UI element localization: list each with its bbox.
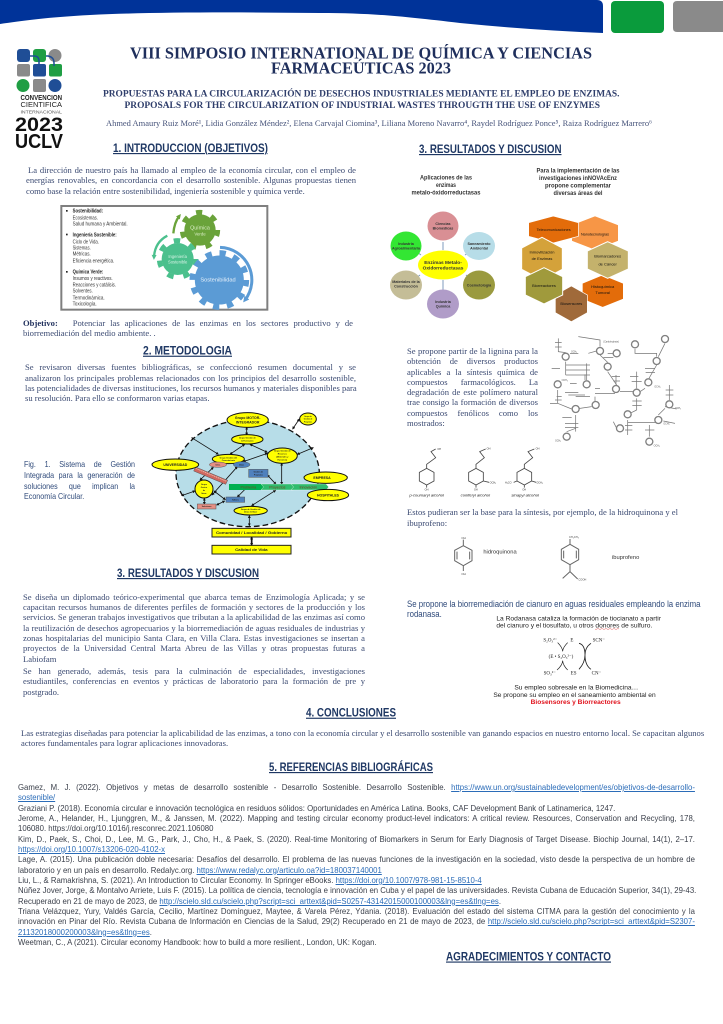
diagram node: Grupo Gestion de Recursos: Humanos) bbox=[277, 460, 288, 462]
text block: figure 1 caption bbox=[24, 460, 135, 501]
text block: methodology: las potencialidades de diversas instituciones, los recursos humanos y materiales disponibles para bbox=[25, 383, 357, 393]
text block: conclusions: Las estrategias diseñadas para potenciar la aplicabilidad de las enzimas, a tono con la economía circular y el desarrollo sostenible van ganando espacios en nuestro entorno local. Se capacitan algunos bbox=[21, 728, 704, 738]
heading: 3. Resultados y discusion (right column): 3. RESULTADOS Y DISCUSION bbox=[419, 143, 562, 156]
chart: management system diagram bbox=[152, 413, 349, 554]
heading: 3. Resultados y discusion (left column): 3. RESULTADOS Y DISCUSION bbox=[117, 567, 259, 580]
diagram: reaction cycle bbox=[543, 638, 605, 677]
logo: Convención Científica Internacional 2023 UCLV bbox=[15, 49, 64, 153]
panel: rhodanese reaction: del cianuro y el tiosulfato, u otros donores de sulfuro. bbox=[496, 624, 653, 630]
heading: enzyme applications: metalo-óxidorreductasas bbox=[412, 189, 481, 196]
diagram node: external group bbox=[300, 413, 316, 425]
icon: gear Quimica Verde bbox=[173, 212, 218, 248]
logo: Convención Científica Internacional 2023 UCLV: INTERNACIONAL bbox=[20, 110, 62, 116]
diagram node: Grupo Gestor de Ideas: Gestor bbox=[201, 486, 207, 489]
hexagon: Biorreactores: Biorreactores bbox=[532, 283, 556, 288]
text block: bibliographic references: Graziani P. (2018). Economía circular e innovación tecnológica en residuos sólidos: Oportunidades en América Latina. Books, CAF Development Bank of Latinamerica, 1247. bbox=[18, 803, 615, 813]
subtitle: PROPUESTAS PARA LA CIRCULARIZACIÓN DE DESECHOS INDUSTRIALES MEDIANTE EL EMPLEO DE ENZIMAS. bbox=[103, 87, 620, 99]
text block: figure 1 caption: Fig. 1. Sistema de Gestión bbox=[24, 460, 135, 469]
text block: objective: Objetivo: Potenciar las aplicaciones de las enzimas en los sectores productivo y de bbox=[23, 318, 353, 328]
diagram node: Grupo Gestor de Ideas: Ideas bbox=[201, 493, 207, 495]
text block: results: Se diseña un diplomado teórico-experimental que abarca temas de Enzimología Aplicada; y se bbox=[23, 592, 365, 602]
list: sustainability concepts: Solventes. bbox=[73, 289, 93, 295]
chart: phenolic monomers: OCH₃ bbox=[490, 482, 496, 485]
panel: sustainability gears figure bbox=[61, 206, 267, 310]
diagram: red and blue process nodes: Talleres bbox=[232, 499, 239, 501]
diagram: green process arrow: Innovación bbox=[299, 485, 317, 489]
diagram node: Grupo Motor: INTEGRADOR bbox=[236, 420, 260, 424]
chart: phenolic monomers: OH bbox=[522, 489, 526, 492]
chart: phenolic monomers: sinapyl alcohol bbox=[511, 493, 539, 497]
diagram node: Universidad: UNIVERSIDAD bbox=[163, 463, 188, 467]
text block: bibliographic references: Kim, D., Paek, S., Choi, D., Lee, M. G., Park, J., Cho, H., & Paek, S. (2020). Real-time Monitoring of Biomarkers in Serum for Early Diagnosis of Target Disease. Biochip Journal, 14(1), 2–17. bbox=[18, 834, 695, 844]
text block: lignin proposal: mostrados: bbox=[407, 418, 445, 428]
panel: rhodanese reaction: Su empleo sobresale en la Biomedicina… bbox=[514, 686, 638, 692]
text block: lignin proposal: compuestos farmacológicos. La bbox=[407, 377, 538, 387]
diagram node: Grupo de Gestion de Ideas de Base: Grupo de Gestión de bbox=[241, 508, 261, 511]
text block: hydroquinone and ibuprofen: ibuprofeno: bbox=[407, 518, 447, 528]
chart: hydroquinone and ibuprofen structures: ibuprofeno bbox=[612, 555, 639, 561]
diagram: green process arrow bbox=[229, 484, 329, 490]
subtitle: PROPOSALS FOR THE CIRCULARIZATION OF INDUSTRIAL WASTES THROUGTH THE USE OF ENZYMES bbox=[124, 100, 600, 111]
title bbox=[130, 44, 592, 78]
list: sustainability concepts: Reacciones y catálisis. bbox=[73, 283, 116, 289]
icon: gear Sostenibilidad: Sostenibilidad bbox=[200, 278, 236, 284]
diagram node: external group: Proyectos bbox=[304, 420, 312, 423]
icon: gear Sostenibilidad bbox=[192, 247, 252, 307]
diagram: reaction cycle: S₂O₃²⁻ bbox=[543, 638, 558, 644]
node: Enzimas Metalo-Oxidorreductasas: Oxidorreductasas bbox=[423, 266, 464, 272]
chart: phenolic monomers: OH bbox=[425, 489, 429, 492]
text block: lignin proposal: obtención de diversos productos bbox=[407, 356, 538, 366]
diagram: red and blue process nodes: Soluciones bbox=[202, 506, 212, 508]
list: sustainability concepts: Ciclo de Vida. bbox=[73, 239, 99, 245]
text block: bibliographic references: 106080. https://doi.org/10.1016/j.resconrec.2021.106080 bbox=[18, 823, 213, 833]
list: sustainability concepts: Eficiencia energética. bbox=[73, 258, 114, 264]
chart: lignin structure: OCH₃ bbox=[663, 423, 670, 425]
list: sustainability concepts: Sostenibilidad: bbox=[73, 209, 103, 215]
text block: bibliographic references: laboratorio y en un país en desarrollo. Redalyc.org. https://www.redalyc.org/articulo.oa?id=180037140001 bbox=[18, 865, 382, 875]
chart: phenolic monomers: OH bbox=[536, 448, 540, 451]
hexagon: Histoquimica Tumoral bbox=[582, 275, 623, 307]
text block: lignin proposal: aplicables a la síntesis química de bbox=[407, 367, 538, 377]
title: FARMACEÚTICAS 2023 bbox=[271, 58, 451, 78]
text block: results: servicios. Se generan trabajos investigativos que tributan a la aplicabilidad de las enzimas así como bbox=[23, 612, 365, 622]
text block: methodology bbox=[25, 362, 357, 403]
diagram node: Hospitales bbox=[307, 489, 349, 501]
text block: hydroquinone and ibuprofen: Estos pudieran ser la base para la síntesis, por ejemplo, de la hidroquinona y el bbox=[407, 507, 678, 517]
diagram: red and blue process nodes bbox=[194, 462, 268, 509]
panel: rhodanese reaction: Biosensores y Biorreactores bbox=[531, 700, 621, 706]
heading: enzyme applications bbox=[412, 174, 481, 196]
diagram: reaction cycle: ES bbox=[571, 672, 577, 677]
text block: objective: biorremediación del medio ambiente. . bbox=[23, 328, 156, 338]
text block: cyanide bioremediation: Se propone la biorremediación de cianuro en aguas residuales empleando la enzima bbox=[407, 598, 701, 608]
diagram node: Grupo Gestor de Ideas: Grupo bbox=[201, 483, 208, 486]
diagram: red and blue process nodes: Datos bbox=[239, 463, 244, 466]
diagram node: Grupo Gestion de Recursos: (Materiales y bbox=[276, 456, 289, 459]
chart: phenolic monomers: coniferyl alcohol bbox=[461, 493, 490, 497]
diagram: reaction cycle: SCN⁻ bbox=[593, 639, 605, 644]
list: sustainability concepts: Termodinámica. bbox=[73, 295, 105, 301]
hexagon: Biomarcadores de Cancer: Biomarcadores bbox=[594, 253, 621, 258]
text block: introduction: La dirección de nuestro país ha llamado al empleo de la economía circular, con el empleo de bbox=[28, 165, 356, 175]
chart: complementary research areas hexagons bbox=[522, 216, 628, 322]
text block: results: proyectos de la Universidad Central Marta Abreu de las Villas y otras propuestas futuras a bbox=[23, 643, 365, 653]
node: Saneamiento Ambiental: Ambiental bbox=[470, 246, 488, 250]
chart: hydroquinone and ibuprofen structures: hidroquinona bbox=[483, 550, 518, 556]
text block: results continued: Se han generado, además, tesis para la culminación de especialidades, investigaciones bbox=[23, 666, 365, 676]
diagram node: Grupo de Gestion de Ideas de Base bbox=[234, 506, 267, 515]
diagram: reaction cycle: SO₃²⁻ bbox=[544, 671, 556, 677]
diagram: red and blue process nodes: Proyectos bbox=[254, 474, 263, 477]
text block: introduction bbox=[26, 165, 356, 196]
text block: bibliographic references: Recuperado en 21 de mayo de 2023, de http://scielo.sld.cu/scielo.php?script=sci_arttext&pid=S0257-43142015000100003&lng=es&tlng=es. bbox=[18, 896, 501, 906]
diagram: green process arrow: Problema bbox=[241, 485, 257, 489]
heading: implementation statement: diversas áreas del bbox=[554, 190, 603, 197]
chart: hydroquinone and ibuprofen structures: OH bbox=[461, 536, 466, 540]
text block: cyanide bioremediation: rodanasa. bbox=[407, 609, 442, 619]
list: sustainability concepts: Insumos y reactivos. bbox=[73, 276, 113, 282]
diagram node: Grupo Gestion de Recursos: Grupo Gestión de bbox=[274, 450, 292, 453]
heading: implementation statement bbox=[536, 167, 620, 197]
text block: methodology: su resolución. Para ello se conformaron varias etapas. bbox=[25, 393, 209, 403]
node: Saneamiento Ambiental: Saneamiento bbox=[468, 242, 491, 246]
text block: lignin proposal: trae consigo la formación de diversos bbox=[407, 397, 538, 407]
heading: 5. Referencias bibliograficas: 5. REFERENCIAS BIBLIOGRÁFICAS bbox=[269, 761, 433, 774]
diagram node: Grupo Gestion de Recursos bbox=[267, 448, 297, 463]
diagram node: Grupo Gestor de Ideas bbox=[195, 480, 213, 498]
text block: bibliographic references: Jerome, A., Helander, H., Ljunggren, M., & Janssen, M. (2022). Mapping and testing circular economy product-level indicators: A critical review. Resources, Conservation and Recycling, 178, bbox=[18, 813, 695, 823]
text block: results continued bbox=[23, 666, 365, 697]
panel: rhodanese reaction bbox=[493, 616, 661, 706]
diagram node: external group: Grupo de bbox=[304, 416, 312, 418]
text block: results continued: postgrado. bbox=[23, 687, 59, 697]
diagram node: external group: Gestión de bbox=[304, 418, 312, 421]
hexagon: Biomarcadores de Cancer: de Cáncer bbox=[598, 262, 618, 267]
heading: implementation statement: Para la implementación de las bbox=[536, 167, 620, 174]
node: Industria Agroalimentaria bbox=[390, 232, 422, 260]
diagram node: Grupo Gestion del Conocimiento: Grupo Gestión del bbox=[220, 456, 237, 459]
chart: phenolic monomers: H₃CO bbox=[505, 482, 512, 485]
chart: phenolic monomers: OH bbox=[487, 448, 491, 451]
icon: gear Quimica Verde: Verde bbox=[194, 232, 206, 237]
text block: results: zonas hospitalarias del municipio Santa Clara, en Villa Clara. Estas investigaciones se insertan a bbox=[23, 633, 365, 643]
diagram node: Hospitales: HOSPITALES bbox=[317, 493, 340, 497]
diagram node: Grupo Gestion del Conocimiento: Conocimiento bbox=[222, 459, 236, 462]
list: sustainability concepts: Salud humana y Ambiental. bbox=[73, 221, 128, 227]
heading: enzyme applications: Aplicaciones de las bbox=[420, 174, 472, 181]
hexagon: Histoquimica Tumoral: Tumoral bbox=[595, 290, 610, 295]
node: Cosmetologia: Cosmetología bbox=[467, 284, 492, 288]
chart: hydroquinone and ibuprofen structures: CH₂CH₃ bbox=[569, 535, 579, 539]
diagram: reaction cycle: (E • S₂O₃²⁻) bbox=[549, 654, 574, 660]
chart: hydroquinone and ibuprofen structures: COOH bbox=[578, 577, 586, 581]
text block: results: capacitan recursos humanos de diferentes perfiles de formación y sectores de la producción y los bbox=[23, 602, 365, 612]
node: Materiales de la Construccion bbox=[390, 270, 422, 300]
diagram box: Comunidad / Localidad / Gobierno bbox=[212, 528, 291, 537]
hexagon: Biomarcadores de Cancer bbox=[587, 242, 628, 278]
chart: oxidoreductase enzyme applications bbox=[390, 212, 495, 318]
chart: phenolic monomers: OCH₃ bbox=[536, 482, 543, 485]
diagram node: Grupo Motor bbox=[227, 413, 268, 427]
text block: results: la reutilización de desechos agropecuarios y la biorremediación de aguas residuales de industrias y bbox=[23, 623, 365, 633]
text block: figure 1 caption: Integrada para la generación de bbox=[24, 471, 135, 480]
chart: lignin structure bbox=[550, 336, 681, 448]
text block: results continued: estudiantiles, conferencias en eventos y prácticas de laboratorio para la formación de pre y bbox=[23, 676, 365, 686]
hexagon: Histoquimica Tumoral: Histoquímica bbox=[591, 284, 615, 289]
text block: introduction: energías renovables, en concordancia con el desarrollo sostenible. Algunas propuestas tienen bbox=[26, 175, 356, 185]
text block: lignin proposal: compuestos fenólicos como los bbox=[407, 408, 538, 418]
chart: lignin structure: OCH₃ bbox=[571, 352, 577, 354]
list: sustainability concepts: Química Verde: bbox=[73, 270, 104, 276]
logo: Convención Científica Internacional 2023 UCLV: 2023 bbox=[15, 115, 63, 136]
chart: phenolic monomers: OH bbox=[437, 448, 441, 451]
text block: bibliographic references: innovación en Pinar del Río. Revista Cubana de Información en Ciencias de la Salud, 29(2) Recuperado en 21 de mayo de 2023, de http://scielo.sld.cu/scielo.php?script=sci_arttext&pid=S2307- bbox=[18, 916, 695, 926]
chart: lignin structure: OCH₃ bbox=[555, 441, 561, 443]
hexagon: Inmovilizacion de Enzimas: Inmovilización bbox=[529, 249, 555, 254]
hexagon: Nanotecnologias: Nanotecnologías bbox=[581, 231, 609, 236]
node: Industria Quimica bbox=[427, 290, 459, 318]
icon: gear Ingenieria Sostenible: Ingeniería bbox=[168, 254, 188, 259]
list: sustainability concepts: Toxicología. bbox=[73, 302, 97, 308]
node: Enzimas Metalo-Oxidorreductasas: Enzimas Metalo- bbox=[424, 260, 462, 266]
logo: Convención Científica Internacional 2023 UCLV: CIENTIFICA bbox=[20, 102, 62, 109]
chart: lignin structure: OCH₃ bbox=[654, 446, 660, 448]
text block: results bbox=[23, 592, 365, 664]
diagram: red and blue process nodes: Gestión de bbox=[254, 471, 263, 474]
diagram node: Grupo de Gestion de Ideas de Base: Ideas de Base bbox=[244, 512, 258, 514]
diagram node: Grupo Gestion del Conocimiento bbox=[212, 454, 244, 464]
list: sustainability concepts bbox=[66, 209, 128, 308]
node: Industria Quimica: Industria bbox=[435, 300, 452, 304]
node: Saneamiento Ambiental bbox=[463, 232, 495, 260]
heading: implementation statement: investigaciones inNOVAcEnz bbox=[539, 175, 617, 182]
text block: figure 1 caption: Economía Circular. bbox=[24, 492, 84, 501]
list: sustainability concepts: Métricas. bbox=[73, 252, 91, 258]
diagram node: Grupo Gestor de Ideas: de bbox=[203, 490, 206, 492]
text block: methodology: Se revisaron diversas fuentes bibliográficas, se confeccionó resumen documental y se bbox=[25, 362, 356, 372]
diagram node: Grupo Gestion de la Formacion: la Formación bbox=[241, 439, 254, 442]
chart: hydroquinone and ibuprofen structures: OH bbox=[461, 572, 466, 576]
panel: rhodanese reaction: La Rodanasa cataliza la formación de tiocianato a partir bbox=[496, 616, 661, 622]
diagram: reaction cycle: CN⁻ bbox=[592, 672, 602, 677]
heading: 4. Conclusiones: 4. CONCLUSIONES bbox=[306, 707, 396, 720]
logo: Convención Científica Internacional 2023 UCLV: CONVENCION bbox=[20, 95, 62, 102]
diagram node: Empresa bbox=[304, 472, 347, 483]
text block: introduction: como base la relación entre sostenibilidad, ingeniería sostenible y química verde. bbox=[26, 186, 305, 196]
panel: rhodanese reaction: Se propone su empleo en el saneamiento ambiental en bbox=[493, 693, 656, 699]
node: Ciencias Biomedicas: Ciencias bbox=[435, 222, 451, 226]
diagram: red and blue process nodes: Ideas bbox=[216, 464, 220, 466]
hexagon: Telecomunicaciones: Telecomunicaciones bbox=[537, 227, 571, 232]
text block: bibliographic references: Liu, L., & Ramakrishna, S. (2021). An Introduction to Circular Economy. In Springer eBooks. https://doi.org/10.1007/978-981-15-8510-4 bbox=[18, 875, 482, 885]
chart: lignin structure: OCH₃ bbox=[654, 386, 661, 388]
heading: implementation statement: propone complementar bbox=[545, 182, 611, 189]
text block: bibliographic references: 21132018000200003&lng=es&tlng=es. bbox=[18, 927, 152, 937]
text block: conclusions: actores fundamentales para lograr aplicaciones innovadoras. bbox=[21, 738, 228, 748]
diagram node: Grupo Gestion de la Formacion bbox=[232, 435, 263, 444]
icon: gear Ingenieria Sostenible bbox=[154, 236, 196, 277]
list: sustainability concepts: Sistemas. bbox=[73, 245, 91, 251]
heading: enzyme applications: enzimas bbox=[436, 182, 456, 189]
text block: bibliographic references: Weetman, C., A (2021). Circular economy Handbook: how to build a more resilient., London, UK: Kogan. bbox=[18, 937, 377, 947]
diagram node: Grupo Motor: Grupo MOTOR- bbox=[235, 416, 261, 420]
node: Industria Agroalimentaria: Agroalimentaria bbox=[392, 246, 421, 250]
text block: bibliographic references: sostenible/ bbox=[18, 792, 55, 802]
list: sustainability concepts: Ecosistemas. bbox=[73, 215, 98, 221]
diagram node: Empresa: EMPRESA bbox=[313, 476, 331, 480]
text block: figure 1 caption: soluciones que implican la bbox=[24, 482, 135, 491]
diagram box: Calidad de Vida bbox=[212, 545, 291, 554]
text block: lignin proposal: Se propone partir de la lignina para la bbox=[407, 346, 538, 356]
diagram node: Grupo Gestion de Recursos: Recursos bbox=[278, 453, 288, 456]
hexagon: Inmovilizacion de Enzimas: de Enzimas bbox=[532, 256, 552, 261]
icon: gear Quimica Verde: Química bbox=[190, 226, 210, 232]
logo: Convención Científica Internacional 2023 UCLV: UCLV bbox=[15, 131, 64, 153]
text block: bibliographic references bbox=[18, 782, 696, 947]
text block: objective bbox=[23, 318, 353, 338]
hexagon: Inmovilizacion de Enzimas bbox=[522, 237, 562, 280]
heading: 2. Metodologia: 2. METODOLOGIA bbox=[143, 345, 233, 358]
heading: 1. Introduccion: 1. INTRODUCCION (OBJETIVOS) bbox=[113, 142, 268, 155]
diagram node: Universidad bbox=[152, 459, 199, 470]
diagram: reaction cycle: E bbox=[570, 639, 573, 644]
icon: gear Ingenieria Sostenible: Sostenible bbox=[168, 260, 188, 265]
text block: bibliographic references: Gamez, M. J. (2022). Objetivos y metas de desarrollo sostenible - Desarrollo Sostenible. Desarrollo Sostenible. https://www.un.org/sustainabledevelopment/es/objetivos-de-desarrollo- bbox=[18, 782, 695, 792]
chart: lignin structure: OCH₃ bbox=[675, 408, 681, 410]
text block: bibliographic references: https://doi.org/10.1007/s13206-020-4102-x bbox=[18, 844, 165, 854]
node: Materiales de la Construccion: Materiales de la bbox=[392, 280, 421, 284]
hexagon: Biosensores: Biosensores bbox=[560, 301, 582, 306]
header banner bbox=[0, 0, 723, 33]
chart: lignin structure: OCH₃ bbox=[562, 380, 568, 382]
text block: bibliographic references: Triana Velázquez, Yury, Valdés García, Cecilio, Martínez Domínguez, Maytee, & Varela Pérez, Ydania. (2018). Evaluación del estado del sistema CITMA para la gestión del conocimiento y la bbox=[18, 906, 695, 916]
text block: cyanide bioremediation bbox=[407, 598, 701, 619]
node: Enzimas Metalo-Oxidorreductasas bbox=[418, 250, 468, 280]
diagram box: Comunidad / Localidad / Gobierno: Comunidad / Localidad / Gobierno bbox=[216, 531, 288, 535]
node: Materiales de la Construccion: Construcción bbox=[394, 284, 419, 288]
list: sustainability concepts: Ingeniería Sostenible: bbox=[73, 232, 117, 238]
text block: results: Labiofam bbox=[23, 654, 56, 664]
chart: phenolic monomers: p-coumaryl alcohol bbox=[408, 493, 444, 497]
diagram node: Grupo Gestion de la Formacion: Grupo Gestión de bbox=[239, 437, 257, 440]
text block: bibliographic references: Núñez Jover, Jorge, & Montalvo Arriete, Luis F. (2015). La política de ciencia, tecnología e innovación en Cuba y el papel de las universidades. Revista Cubana de Educación Superior, 34(1), 29-43. bbox=[18, 885, 696, 895]
text block: methodology: analizaron los principales problemas relacionados con los principios del desarrollo sostenible, bbox=[25, 373, 356, 383]
text block: hydroquinone and ibuprofen bbox=[407, 507, 678, 528]
heading: Agradecimientos y contacto: AGRADECIMIENTOS Y CONTACTO bbox=[446, 950, 611, 964]
title: VIII SIMPOSIO INTERNATIONAL DE QUÍMICA Y CIENCIAS bbox=[130, 44, 592, 62]
node: Industria Quimica: Química bbox=[436, 304, 451, 308]
text block: lignin proposal: degradación de este polímero natural bbox=[407, 387, 538, 397]
node: Ciencias Biomedicas: Biomédicas bbox=[433, 226, 453, 230]
chart: phenolic monomers bbox=[408, 448, 543, 497]
text block: conclusions bbox=[21, 728, 704, 748]
chart: phenolic monomers: OH bbox=[474, 489, 478, 492]
authors: Ahmed Amaury Ruiz Moré¹, Lidia González Méndez², Elena Carvajal Ciomina³, Liliana Moreno Navarro⁴, Raydel Rodríguez Ponce⁵, Raiza Rodríguez Marrero⁶ bbox=[106, 118, 652, 128]
node: Ciencias Biomedicas bbox=[428, 212, 458, 240]
diagram: green process arrow: Proyectos bbox=[269, 485, 286, 489]
text block: lignin proposal bbox=[407, 346, 538, 428]
diagram box: Calidad de Vida: Calidad de Vida bbox=[235, 548, 268, 552]
node: Industria Agroalimentaria: Industria bbox=[398, 242, 415, 246]
subtitle bbox=[103, 87, 620, 111]
text block: bibliographic references: Lage, A. (2015). Una publicación doble necesaria: Desafíos del desarrollo. El problema de las nuevas funciones de la investigación en la sociedad, visto desde la perspectiva de un hombre de bbox=[18, 854, 695, 864]
chart: hydroquinone and ibuprofen structures bbox=[455, 535, 639, 581]
chart: lignin structure: (Carbohydrate) bbox=[603, 340, 619, 343]
